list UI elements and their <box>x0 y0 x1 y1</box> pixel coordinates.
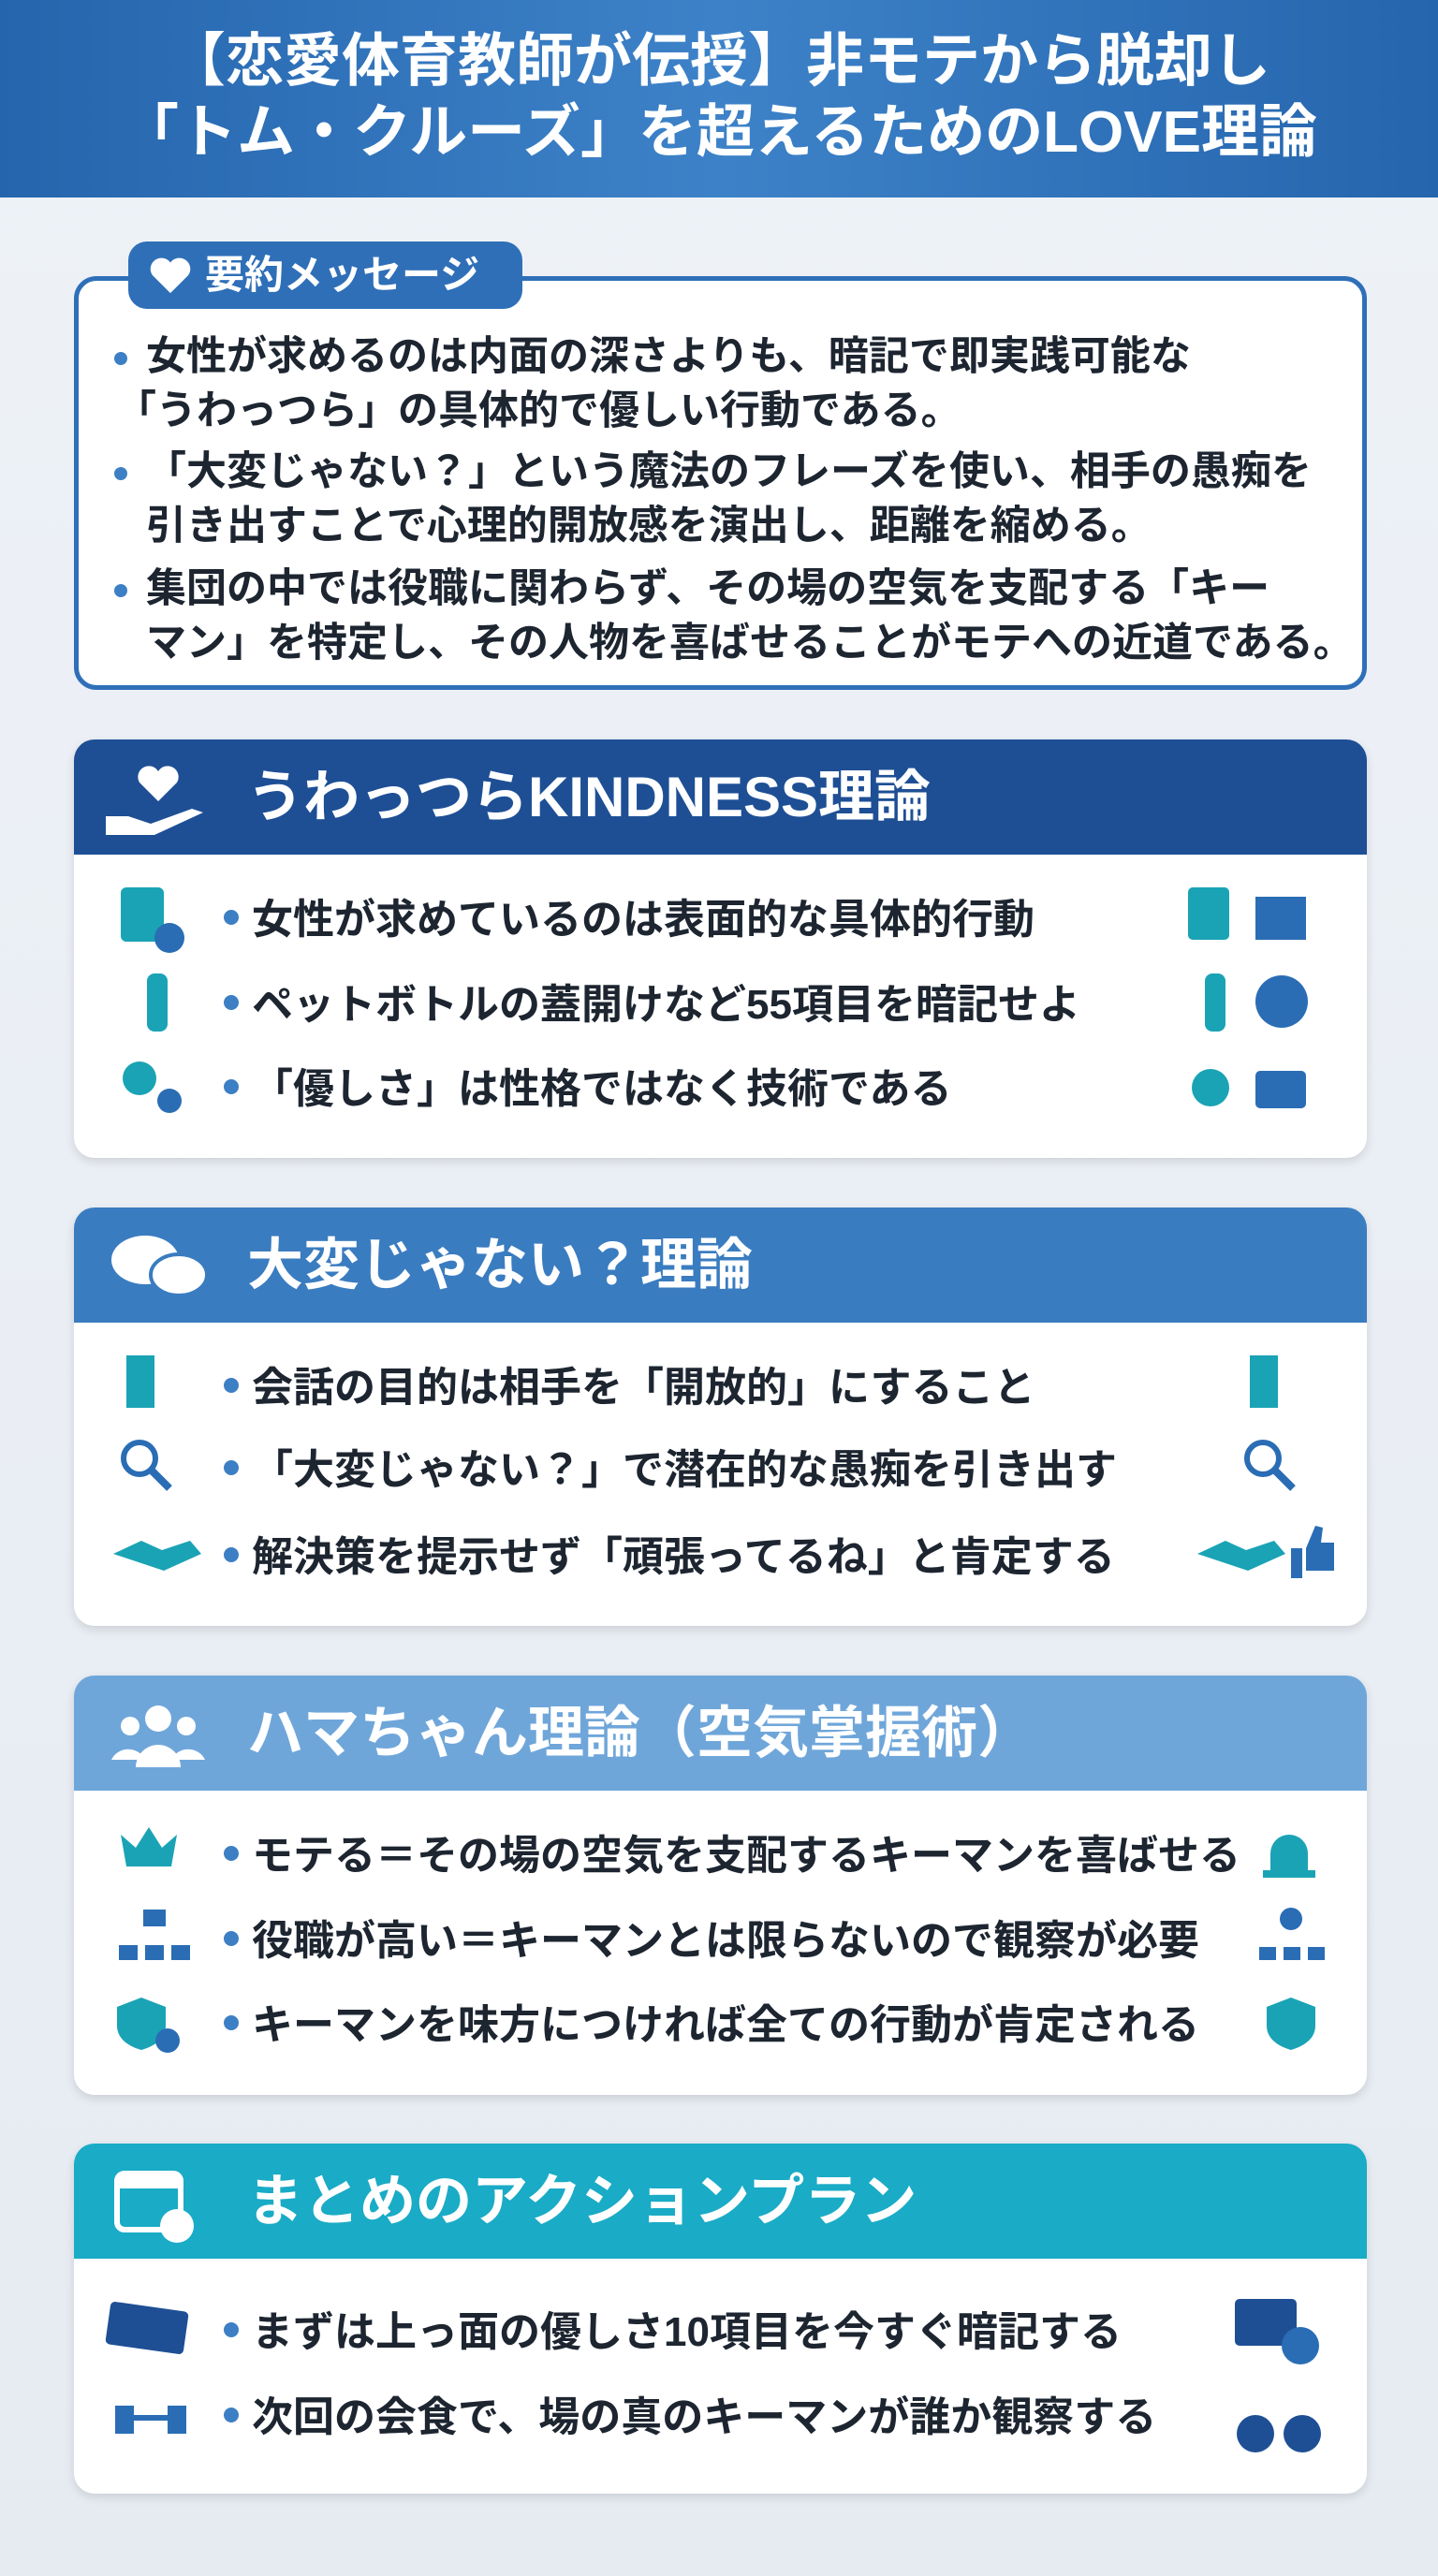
rows 4: まずは上っ面の優しさ10項目を今すぐ暗記する <box>252 2309 1122 2355</box>
header 3: ハマちゃん理論（空気掌握術） <box>247 1702 1034 1764</box>
header 4: まとめのアクションプラン <box>247 2170 917 2232</box>
summary bullet 2 <box>114 449 1312 549</box>
section 2 <box>74 1208 1367 1626</box>
header 2: 大変じゃない？理論 <box>247 1234 753 1296</box>
summary bullet 1: 「うわっつら」の具体的で優しい行動である。 <box>116 388 961 433</box>
section 4 <box>74 2144 1367 2494</box>
header 1 <box>74 739 1367 855</box>
summary bullet 2: 「大変じゃない？」という魔法のフレーズを使い、相手の愚痴を <box>146 449 1312 494</box>
icons left 1 <box>121 887 184 1113</box>
summary tag <box>128 242 522 309</box>
header 4 <box>74 2144 1367 2259</box>
icons 2 <box>113 1355 201 1571</box>
header 3 <box>74 1676 1367 1791</box>
rows 3: モテる＝その場の空気を支配するキーマンを喜ばせる <box>252 1833 1240 1879</box>
icons 4 <box>105 2302 189 2434</box>
icons right 1 <box>1188 887 1308 1108</box>
summary tag: 要約メッセージ <box>205 253 479 297</box>
icons 3 <box>117 1827 190 2053</box>
section 3: キーマンを味方につければ全ての行動が肯定される <box>252 2002 1199 2048</box>
title: 「トム・クルーズ」を超えるためのLOVE理論 <box>121 100 1317 165</box>
summary bullet 2: 引き出すことで心理的開放感を演出し、距離を縮める。 <box>146 504 1152 549</box>
summary bullet 3 <box>114 566 1354 666</box>
section 3 <box>74 1676 1367 2095</box>
title <box>0 0 1438 198</box>
panel: summary <box>74 276 1367 690</box>
section 2: 「大変じゃない？」で潜在的な愚痴を引き出す <box>252 1447 1117 1493</box>
header 1: うわっつらKINDNESS理論 <box>247 766 931 828</box>
section 1: 「優しさ」は性格ではなく技術である <box>252 1066 952 1112</box>
header 2 <box>74 1208 1367 1323</box>
summary bullet 1: 女性が求めるのは内面の深さよりも、暗記で即実践可能な <box>146 334 1191 379</box>
section 4: 次回の会食で、場の真のキーマンが誰か観察する <box>252 2394 1156 2440</box>
summary bullet 3: マン」を特定し、その人物を喜ばせることがモテへの近道である。 <box>146 621 1354 666</box>
summary bullet 1 <box>114 334 1191 433</box>
section 1: ペットボトルの蓋開けなど55項目を暗記せよ <box>252 982 1080 1028</box>
rows 1: 女性が求めているのは表面的な具体的行動 <box>252 897 1034 943</box>
title: 【恋愛体育教師が伝授】非モテから脱却し <box>168 29 1270 94</box>
section 2: 解決策を提示せず「頑張ってるね」と肯定する <box>252 1534 1115 1580</box>
rows 2: 会話の目的は相手を「開放的」にすること <box>252 1365 1034 1411</box>
section 1 <box>74 739 1367 1158</box>
summary bullet 3: 集団の中では役職に関わらず、その場の空気を支配する「キー <box>146 566 1269 611</box>
section 3: 役職が高い＝キーマンとは限らないので観察が必要 <box>252 1918 1199 1964</box>
